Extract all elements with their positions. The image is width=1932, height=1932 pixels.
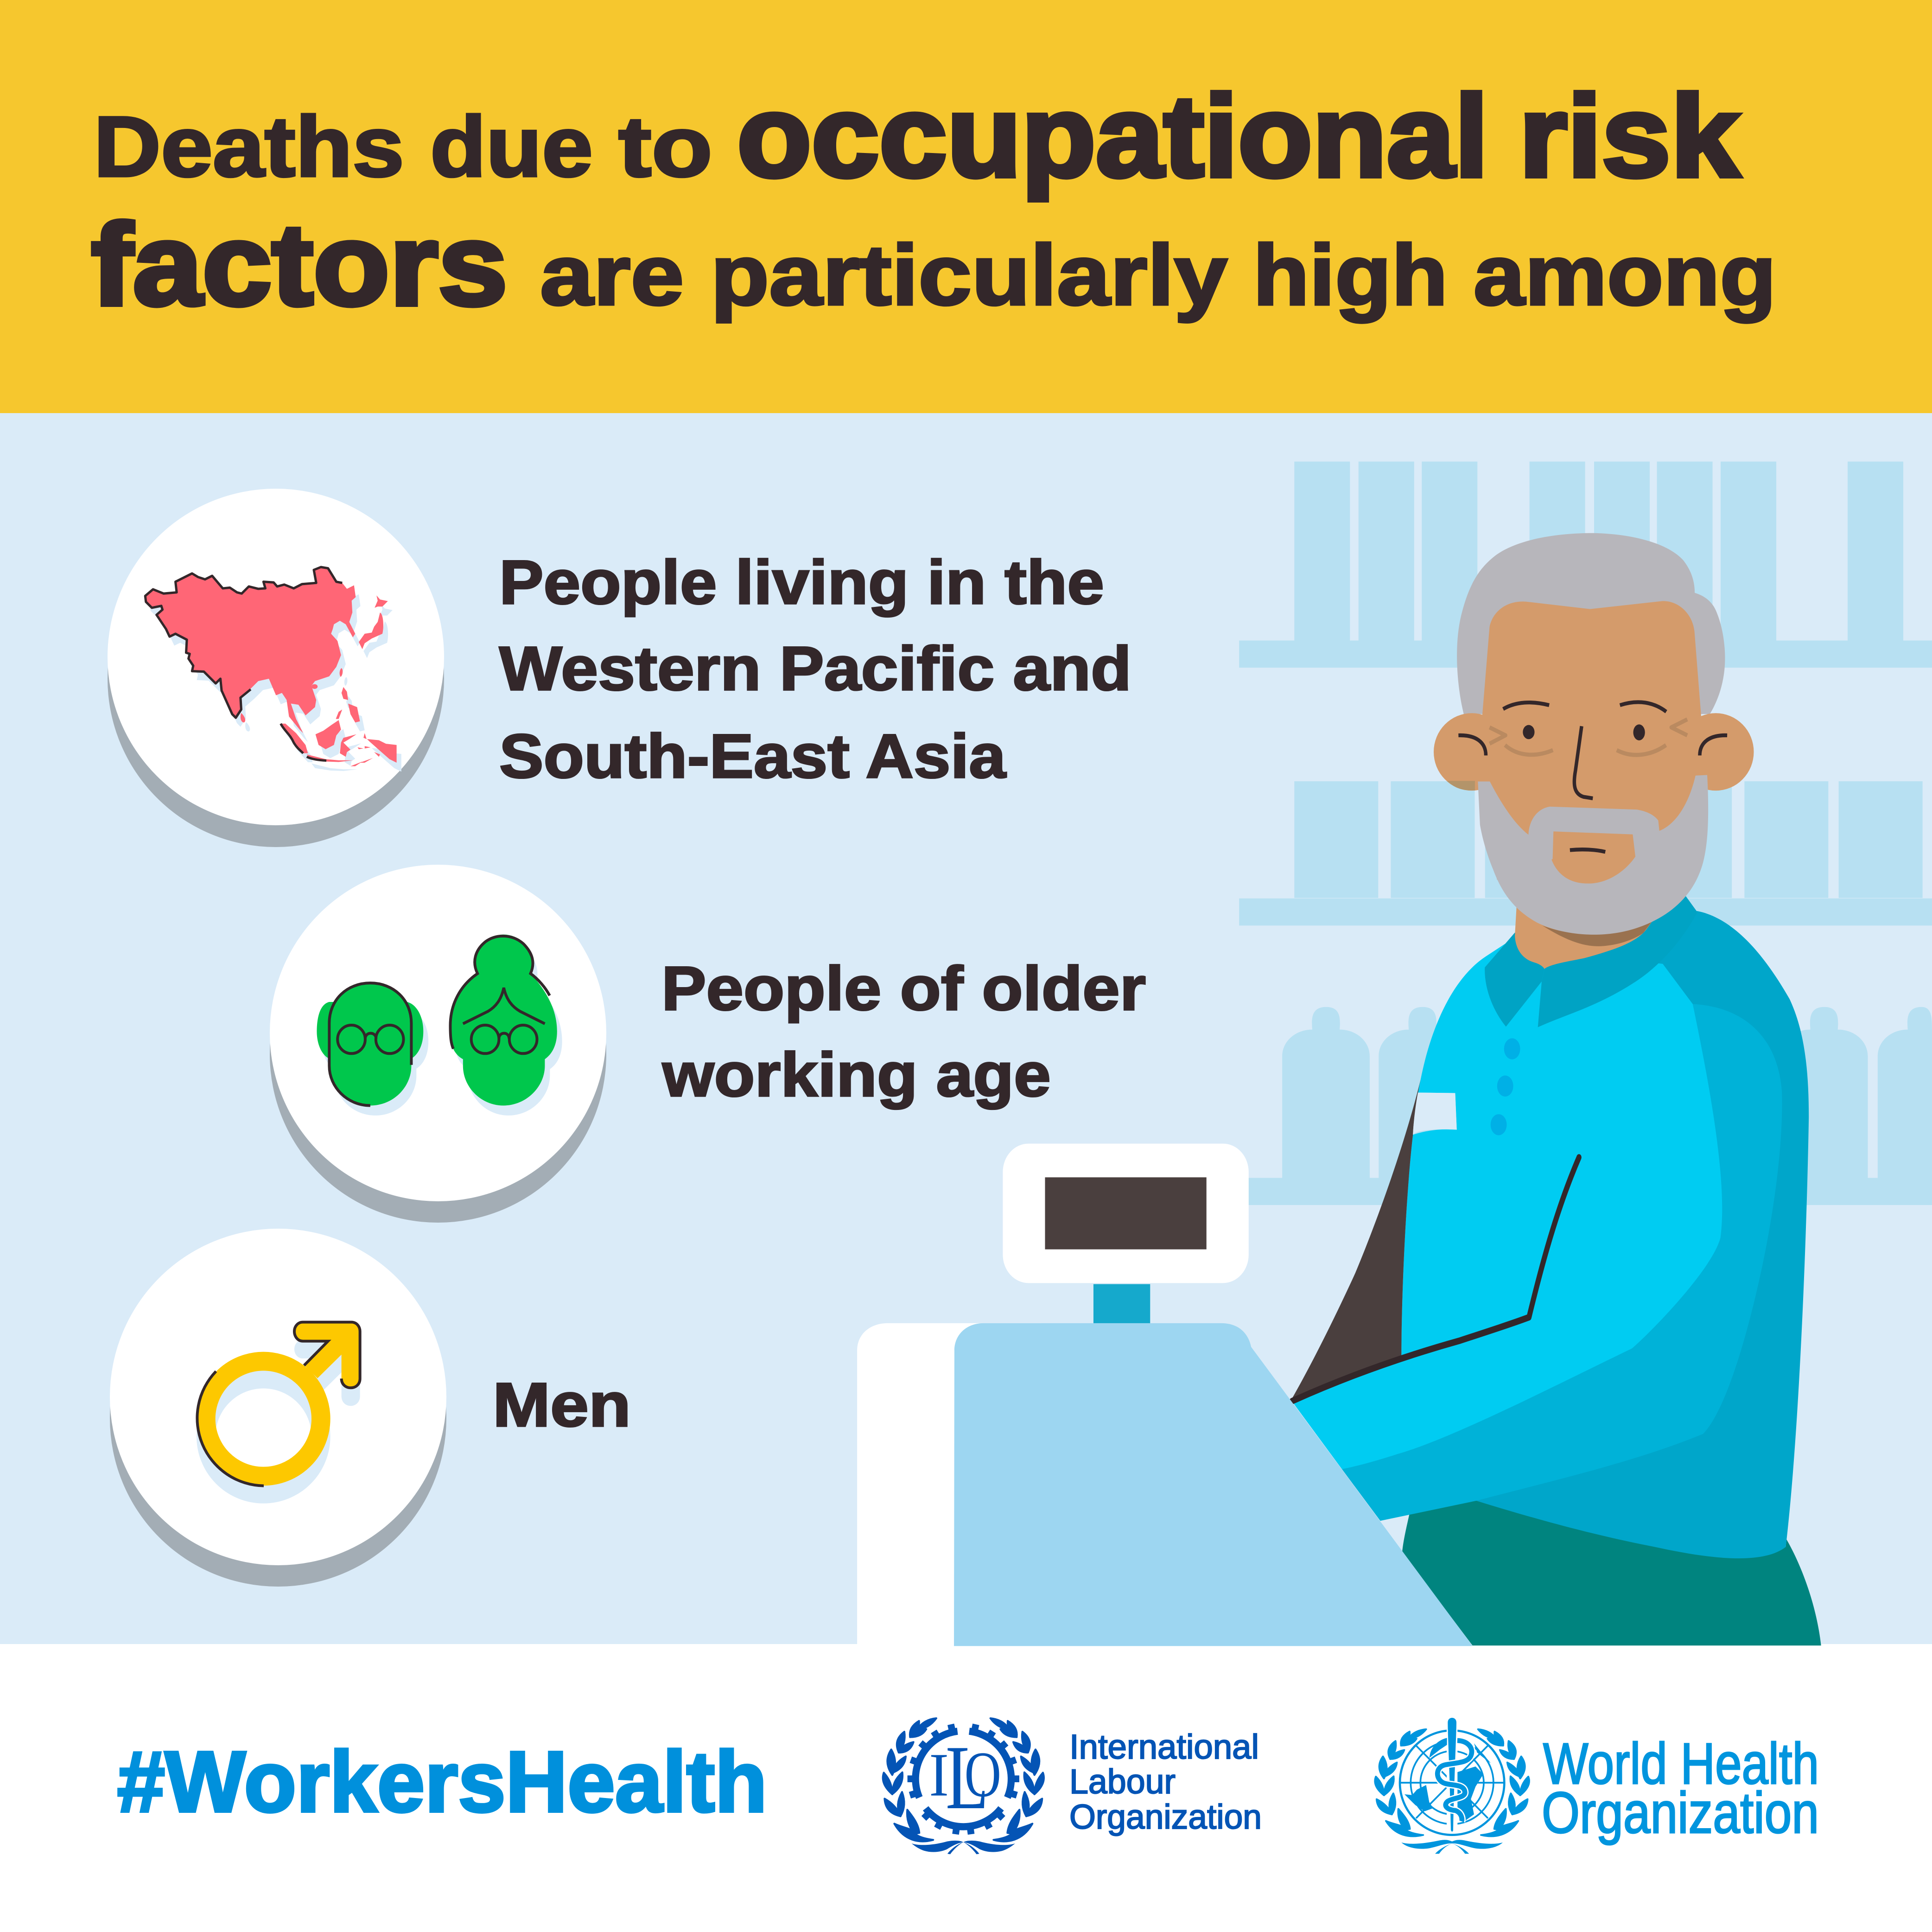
title: factors — [91, 200, 508, 329]
icon: older man and woman with glasses — [317, 935, 562, 1116]
logo text: International Labour Organization: Organization — [1069, 1798, 1262, 1836]
cashier: man at the till — [1292, 533, 1821, 1645]
text: people living in the Western Pacific and South-East Asia: People living in the — [499, 548, 1104, 617]
cashier head: hair, face and beard — [1434, 533, 1754, 969]
logo text: World Health Organization — [1542, 1732, 1819, 1845]
logo: International Labour Organization emblem: L — [946, 1727, 989, 1828]
text: people living in the Western Pacific and South-East Asia — [499, 548, 1131, 791]
icon circle: older workers — [270, 865, 606, 1223]
icon: map of Western Pacific and South-East Asia — [145, 567, 401, 772]
logo: International Labour Organization emblem: O — [965, 1739, 1001, 1811]
title: Deaths — [94, 99, 404, 195]
icon circle: map of Asia — [108, 489, 444, 847]
icon: male symbol — [197, 1322, 360, 1494]
register back panel — [857, 1323, 1041, 1646]
title: due — [430, 99, 593, 195]
title: risk — [1519, 71, 1740, 201]
background shelves with boxes and bottles — [1239, 462, 1932, 1205]
text: people of older working age: working age — [662, 1040, 1051, 1109]
panel: light blue illustration background — [0, 413, 1932, 1644]
logo text: World Health Organization: Organization — [1542, 1781, 1819, 1845]
cash register — [857, 1144, 1473, 1646]
title: occupational — [737, 71, 1488, 201]
text: men: Men — [493, 1371, 631, 1440]
register display screen — [1045, 1177, 1207, 1250]
icon circle: men — [110, 1229, 446, 1587]
logo text: International Labour Organization: Labour — [1069, 1762, 1176, 1801]
register counter body — [954, 1323, 1473, 1646]
text: people of older working age — [661, 954, 1146, 1109]
panel: yellow title banner — [0, 0, 1932, 413]
register pole — [1093, 1284, 1150, 1324]
title — [91, 71, 1776, 329]
logo: International Labour Organization emblem — [883, 1718, 1044, 1854]
cashier body: shirt, apron and trousers — [1292, 893, 1821, 1645]
register display — [1003, 1144, 1249, 1283]
logo text: International Labour Organization: International — [1069, 1728, 1259, 1766]
hashtag: #WorkersHealth — [117, 1734, 767, 1830]
logo text: International Labour Organization — [1069, 1728, 1262, 1836]
text: people living in the Western Pacific and South-East Asia: South-East Asia — [499, 722, 1007, 791]
logo text: World Health Organization: World Health — [1543, 1732, 1819, 1796]
title: are particularly — [540, 228, 1227, 323]
text: people of older working age: People of older — [661, 954, 1146, 1023]
text: people living in the Western Pacific and South-East Asia: Western Pacific and — [499, 634, 1131, 703]
logo: International Labour Organization emblem: I — [929, 1741, 949, 1809]
logo: World Health Organization emblem — [1375, 1718, 1529, 1854]
title: high among — [1253, 228, 1776, 323]
title: to — [618, 99, 712, 195]
